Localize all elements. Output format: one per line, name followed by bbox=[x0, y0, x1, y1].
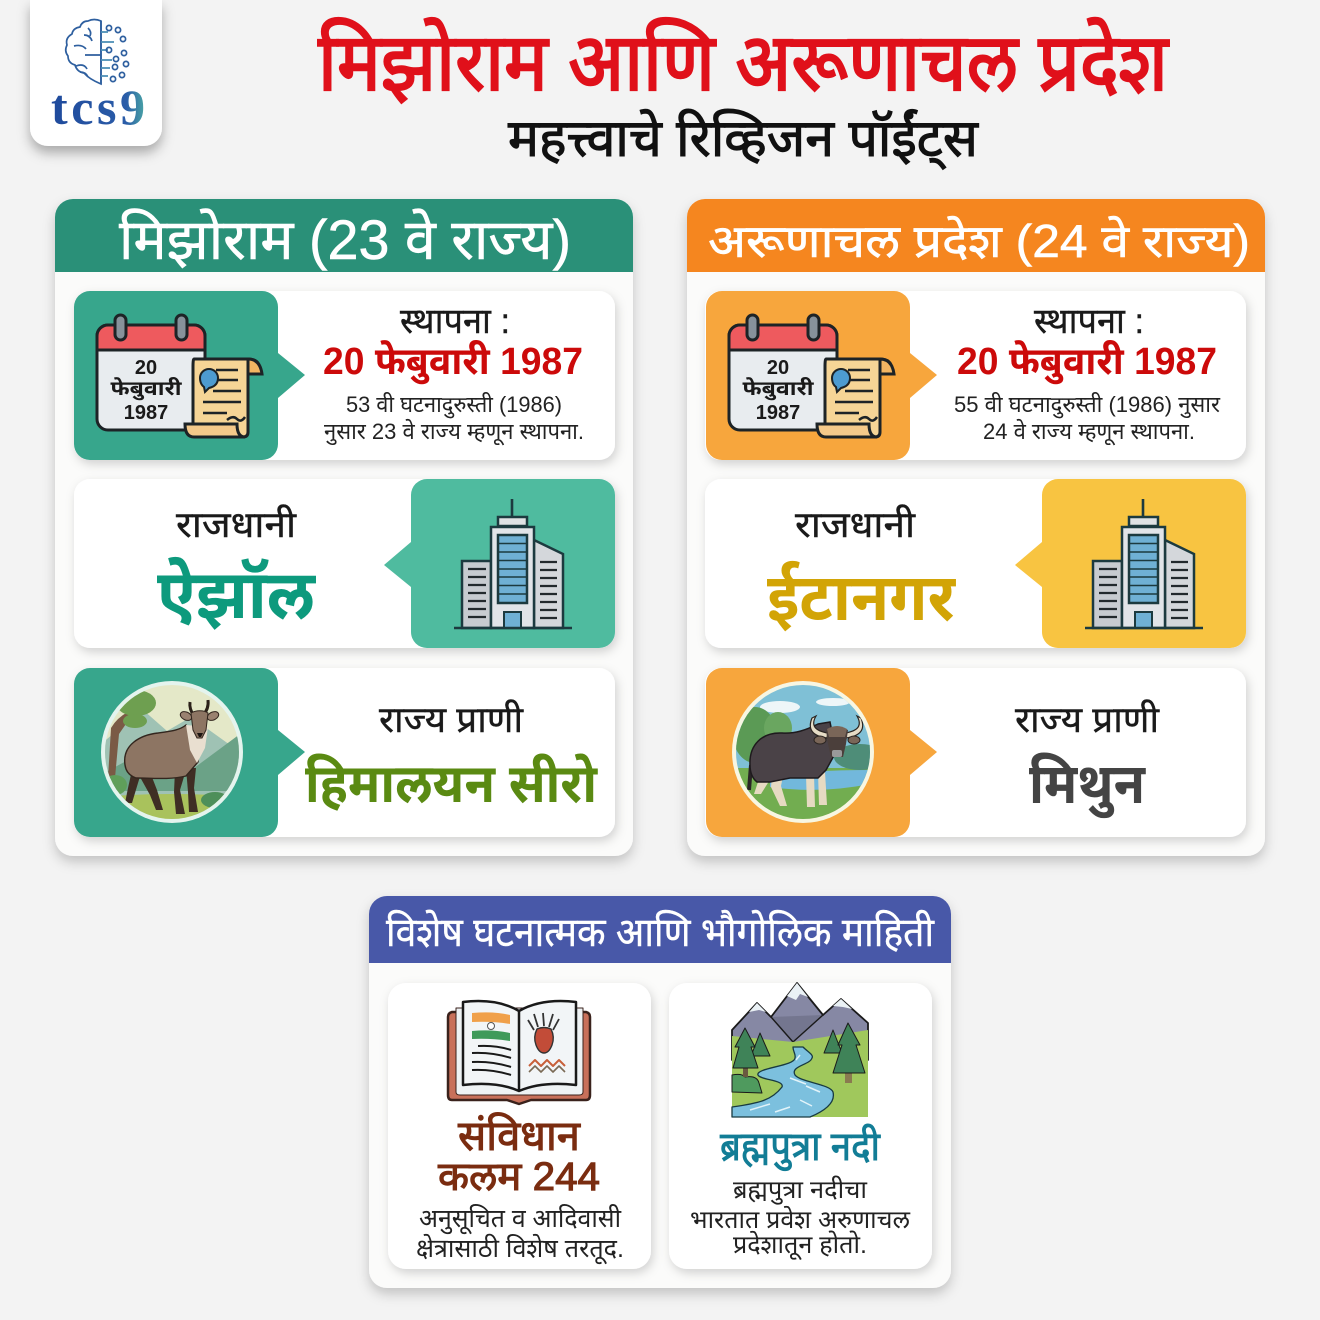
heading: विशेष घटनात्मक आणि भौगोलिक माहिती bbox=[386, 910, 935, 955]
Mizoram heading: मिझोराम (23 वे राज्य) bbox=[119, 208, 571, 271]
icon: brain circuit bbox=[66, 20, 129, 84]
Mizoram heading bbox=[55, 199, 633, 272]
card: constitution: क्षेत्रासाठी विशेष तरतूद. bbox=[416, 1233, 624, 1264]
card: capital: राजधानी bbox=[795, 504, 916, 545]
card: capital bbox=[74, 479, 615, 648]
panel: Mizoram bbox=[55, 199, 633, 856]
card: establishment: 20 फेबुवारी 1987 bbox=[957, 339, 1217, 385]
icon: open book bbox=[448, 1001, 590, 1104]
title: मिझोराम आणि अरूणाचल प्रदेश bbox=[318, 17, 1169, 107]
card: Brahmaputra: ब्रह्मपुत्रा नदीचा bbox=[733, 1175, 868, 1205]
icon: calendar and scroll bbox=[97, 315, 262, 437]
icon: Himalayan serow bbox=[100, 680, 244, 827]
card: establishment: 20 फेबुवारी 1987 bbox=[323, 339, 583, 385]
card: capital bbox=[705, 479, 1246, 648]
logo wordmark: tcs9 bbox=[51, 79, 145, 135]
card: constitution: अनुसूचित व आदिवासी bbox=[419, 1203, 622, 1234]
card: state animal: मिथुन bbox=[1029, 752, 1146, 819]
icon: mithun bbox=[732, 681, 874, 823]
card: Brahmaputra: भारतात प्रवेश अरुणाचल bbox=[690, 1204, 911, 1234]
card: state animal: राज्य प्राणी bbox=[379, 699, 524, 740]
icon: building bbox=[1085, 499, 1203, 628]
card: state animal: राज्य प्राणी bbox=[1015, 699, 1160, 740]
card: establishment bbox=[74, 291, 615, 460]
card: capital: ईटानगर bbox=[767, 560, 957, 634]
icon: calendar and scroll bbox=[729, 315, 894, 437]
icon: calendar and scroll: फेबुवारी bbox=[742, 376, 815, 401]
Arunachal heading: अरूणाचल प्रदेश (24 वे राज्य) bbox=[708, 214, 1250, 267]
card: establishment: 55 वी घटनादुरुस्ती (1986) नुसार bbox=[954, 392, 1221, 419]
card: constitution: संविधान bbox=[458, 1112, 581, 1159]
icon: calendar and scroll: 1987 bbox=[124, 402, 168, 424]
card: Brahmaputra bbox=[669, 983, 932, 1269]
card: establishment: स्थापना : bbox=[400, 302, 510, 341]
panel: special constitutional and geographic info bbox=[369, 896, 951, 1288]
icon: mountains and river bbox=[732, 983, 868, 1117]
card: establishment: स्थापना : bbox=[1034, 302, 1144, 341]
icon: calendar and scroll: 20 bbox=[135, 357, 157, 379]
card: capital: ऐझॉल bbox=[157, 557, 317, 633]
card: Brahmaputra: प्रदेशातून होतो. bbox=[733, 1229, 867, 1260]
panel: Arunachal Pradesh bbox=[687, 199, 1265, 856]
heading bbox=[369, 896, 951, 963]
subtitle: महत्त्वाचे रिव्हिजन पॉईंट्स bbox=[508, 109, 979, 170]
card: state animal: हिमालयन सीरो bbox=[305, 753, 598, 814]
card: state animal bbox=[705, 668, 1246, 837]
card: constitution: कलम 244 bbox=[438, 1155, 600, 1199]
icon: building bbox=[454, 499, 572, 628]
icon: calendar and scroll: 1987 bbox=[756, 402, 800, 424]
card: Brahmaputra: ब्रह्मपुत्रा नदी bbox=[720, 1124, 881, 1170]
Arunachal heading bbox=[687, 199, 1265, 272]
card: establishment: नुसार 23 वे राज्य म्हणून स्थापना. bbox=[324, 418, 584, 446]
card: establishment bbox=[705, 291, 1246, 460]
logo card bbox=[30, 0, 162, 146]
card: establishment: 24 वे राज्य म्हणून स्थापना. bbox=[983, 418, 1195, 446]
icon: calendar and scroll: फेबुवारी bbox=[110, 376, 183, 401]
card: state animal bbox=[74, 668, 615, 837]
icon: calendar and scroll: 20 bbox=[767, 357, 789, 379]
card: constitution bbox=[388, 983, 651, 1269]
card: establishment: 53 वी घटनादुरुस्ती (1986) bbox=[346, 392, 562, 419]
card: capital: राजधानी bbox=[176, 504, 297, 545]
